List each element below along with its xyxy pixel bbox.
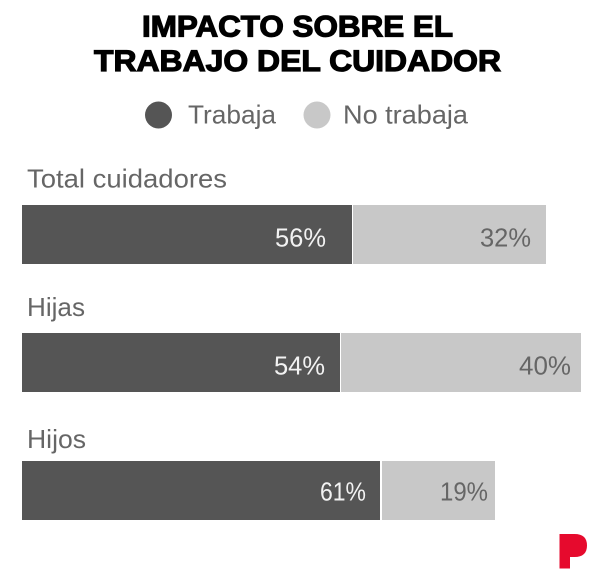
bar: Trabaja 54%: [22, 333, 340, 392]
bar: No trabaja 19%: [382, 461, 495, 520]
title: TRABAJO DEL CUIDADOR: [94, 45, 501, 78]
value: 54%: 54%: [274, 350, 325, 380]
bar: Trabaja 61%: [22, 461, 380, 520]
value: 19%: 19%: [440, 476, 488, 506]
legend item: No trabaja: No trabaja: [343, 100, 469, 130]
chart row: Total cuidadores: [22, 164, 546, 264]
title: [94, 10, 501, 78]
icon: red P logo: [560, 534, 587, 568]
legend item: Trabaja: [145, 100, 277, 130]
bar: Trabaja 56%: [22, 205, 352, 264]
value: 56%: 56%: [275, 222, 326, 252]
legend: [145, 100, 469, 130]
chart row: Total cuidadores: Total cuidadores: [27, 164, 227, 194]
bar: No trabaja 40%: [341, 333, 581, 392]
value: 32%: 32%: [480, 222, 531, 252]
chart row: Hijos: [22, 424, 495, 520]
chart row: Hijas: Hijas: [27, 292, 85, 322]
title: IMPACTO SOBRE EL: [142, 10, 453, 44]
legend item: Trabaja: Trabaja: [188, 100, 277, 130]
chart row: Hijas: [22, 292, 581, 392]
value: 61%: 61%: [320, 476, 366, 506]
value: 40%: 40%: [519, 350, 571, 380]
bar: No trabaja 32%: [353, 205, 546, 264]
chart row: Hijos: Hijos: [27, 424, 86, 454]
